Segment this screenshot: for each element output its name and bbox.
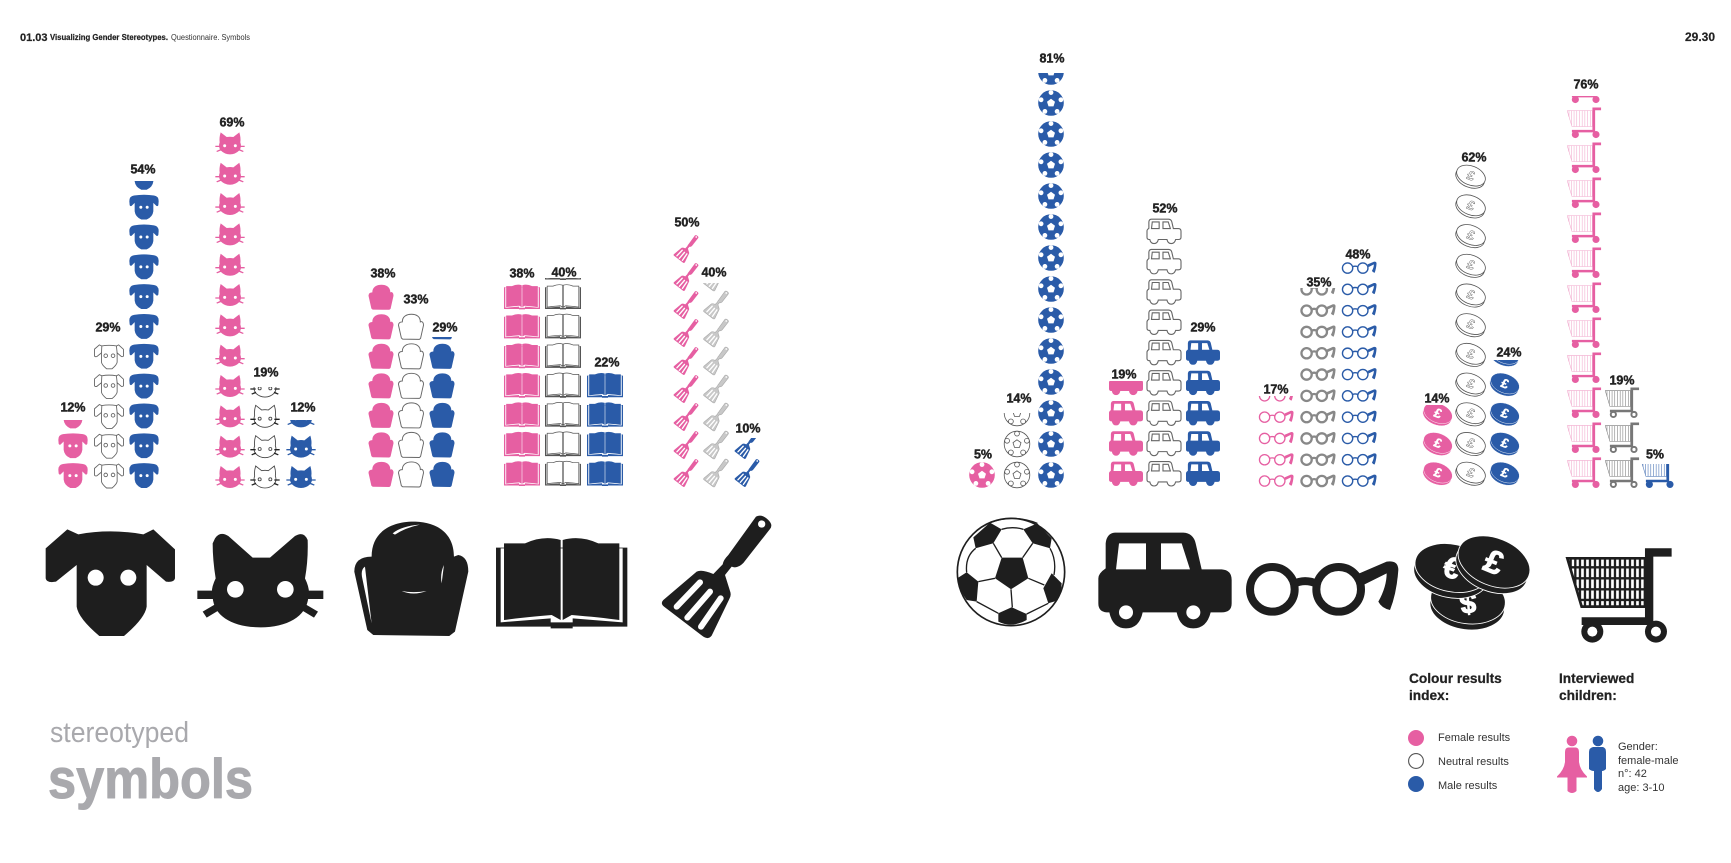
label 19%: 19%: [1609, 374, 1635, 388]
book female column: [504, 285, 540, 486]
icon: large coins: $: [1458, 585, 1478, 619]
cart female column: [1567, 73, 1601, 488]
label 12%: 12%: [290, 400, 316, 414]
label 69%: 69%: [219, 116, 245, 130]
page number: 29.30: [1685, 30, 1715, 44]
panel heading: Interviewed: [1559, 671, 1634, 686]
chart: shopping cart: [1567, 73, 1675, 643]
icon: male figure: [1589, 736, 1606, 792]
car male column: [1186, 340, 1220, 486]
label 50%: 50%: [674, 216, 700, 230]
title: stereotyped symbols: [48, 717, 253, 810]
label 17%: 17%: [1263, 382, 1289, 396]
label 22%: 22%: [594, 356, 620, 370]
football male column: [1038, 59, 1064, 488]
icon: large cat: [197, 534, 323, 627]
armchair male column: [430, 337, 454, 487]
label 12%: 12%: [60, 400, 86, 414]
label 19%: 19%: [1111, 368, 1137, 382]
label 19%: 19%: [253, 366, 279, 380]
label 38%: 38%: [370, 266, 396, 280]
book neutral column: [545, 255, 581, 486]
survey details text: age: 3-10: [1618, 782, 1664, 794]
label 24%: 24%: [1496, 346, 1522, 360]
chart: armchair: [354, 266, 468, 636]
glasses female column: [1259, 389, 1294, 486]
chart: spatula: [662, 216, 771, 638]
label 40%: 40%: [701, 266, 727, 280]
survey details text: female-male: [1618, 755, 1679, 767]
legend heading: Colour results: [1409, 671, 1502, 686]
icon: large armchair: [354, 522, 468, 636]
icon: large car: [1098, 533, 1232, 628]
cart neutral column: [1605, 387, 1639, 488]
panel heading: children:: [1559, 688, 1617, 703]
label 38%: 38%: [509, 266, 535, 280]
label 5%: 5%: [974, 448, 992, 462]
label 48%: 48%: [1345, 248, 1371, 262]
spatula neutral column: [704, 263, 728, 487]
armchair neutral column: [398, 314, 424, 487]
icon: large dog: [46, 529, 175, 636]
label 14%: 14%: [1424, 392, 1450, 406]
label 81%: 81%: [1039, 52, 1065, 66]
label 76%: 76%: [1573, 78, 1599, 92]
legend item: neutral: Neutral results: [1438, 756, 1509, 768]
header: section title: [20, 32, 250, 44]
dog neutral column: [95, 345, 123, 488]
car neutral column: [1147, 219, 1181, 486]
title: stereotyped symbols: symbols: [48, 747, 253, 810]
icon: female figure: [1557, 736, 1587, 793]
icon: large coins: [1401, 525, 1538, 652]
label 33%: 33%: [403, 292, 429, 306]
label 10%: 10%: [735, 422, 761, 436]
survey details text: n°: 42: [1618, 768, 1647, 780]
icon: large shopping cart: [1567, 548, 1672, 643]
label 52%: 52%: [1152, 202, 1178, 216]
icon: large coins: £: [1479, 542, 1509, 582]
cart male column: [1642, 464, 1674, 488]
header: section title: Questionnaire. Symbols: [171, 33, 250, 42]
label 5%: 5%: [1646, 448, 1664, 462]
label 54%: 54%: [130, 162, 156, 176]
legend heading: index:: [1409, 688, 1449, 703]
car female column: [1109, 371, 1143, 486]
armchair female column: [368, 285, 394, 487]
icon: large book: [496, 538, 627, 628]
legend item: female: Female results: [1438, 732, 1511, 744]
cat neutral column: [250, 375, 280, 488]
dog male column: [129, 165, 159, 488]
glasses male column: [1342, 262, 1377, 486]
title: stereotyped symbols: stereotyped: [50, 717, 189, 749]
legend item: male: Male results: [1438, 780, 1498, 792]
icon: large coins: €: [1438, 550, 1466, 587]
label 40%: 40%: [551, 266, 577, 280]
cat female column: [215, 132, 245, 488]
coins neutral column: [1453, 161, 1488, 489]
panel: interviewed children: [1557, 671, 1679, 794]
coins female column: [1422, 405, 1452, 486]
header: section title: 01.03: [20, 32, 48, 44]
chart: coins: [1414, 152, 1530, 630]
book male column: [587, 373, 623, 486]
icon: large spatula: [662, 516, 771, 638]
chart: book: [496, 255, 627, 628]
label 29%: 29%: [1190, 320, 1216, 334]
survey details text: Gender:: [1618, 741, 1658, 753]
icon: large glasses: [1250, 561, 1398, 612]
chart: glasses: [1250, 248, 1398, 612]
spatula male column: [734, 438, 760, 487]
spatula female column: [674, 235, 698, 487]
chart: car: [1098, 202, 1232, 628]
label 62%: 62%: [1461, 150, 1487, 164]
label 29%: 29%: [95, 320, 121, 334]
cat male column: [286, 420, 316, 488]
chart: dog: [46, 162, 175, 636]
header: section title: Visualizing Gender Stereotypes.: [50, 33, 168, 42]
football neutral column: [1004, 400, 1030, 488]
chart: football: [957, 52, 1065, 626]
label 29%: 29%: [432, 320, 458, 334]
label 35%: 35%: [1306, 276, 1332, 290]
icon: large football: [957, 518, 1065, 626]
glasses neutral column: [1301, 283, 1336, 486]
legend: colour results index: [1408, 671, 1511, 792]
football female column: [969, 462, 995, 488]
coins male column: [1490, 360, 1520, 486]
chart: cat: [197, 116, 323, 627]
dog female column: [58, 420, 88, 488]
label 14%: 14%: [1006, 392, 1032, 406]
